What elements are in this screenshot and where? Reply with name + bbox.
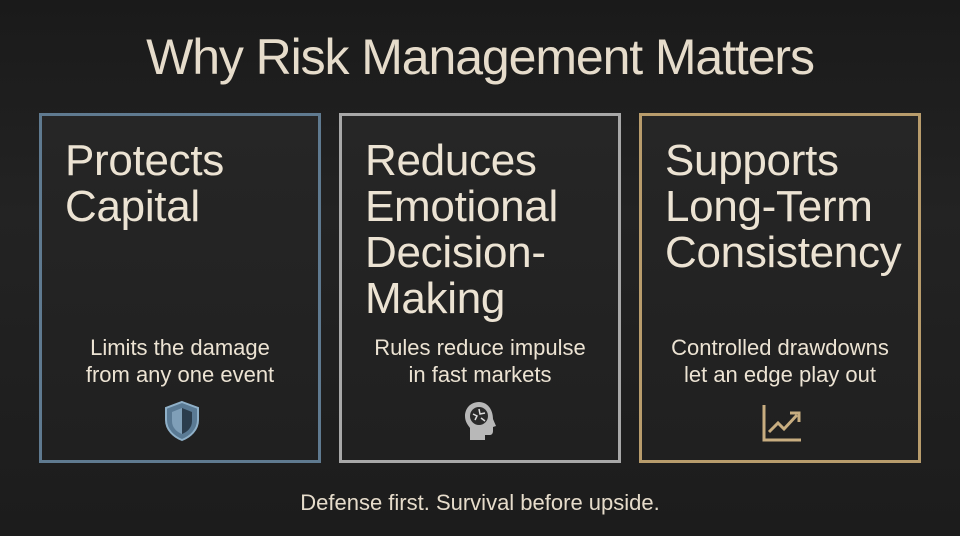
panel: protects capital (39, 113, 321, 463)
panel: reduces emotional decision-making (339, 113, 621, 463)
text: controlled drawdowns (671, 335, 889, 387)
heading: reduces emotional: Reduces (365, 136, 537, 185)
text: limits damage: from any one event (86, 362, 274, 387)
text: rules reduce impulse (374, 335, 586, 387)
text: limits damage: Limits the damage (90, 335, 270, 360)
text: limits damage (86, 335, 274, 387)
text: controlled drawdowns: let an edge play out (684, 362, 876, 387)
icon: head with brain (465, 402, 496, 440)
heading: protects capital: Protects (65, 136, 224, 185)
icon: shield (165, 400, 199, 441)
heading: supports long-term: Supports (665, 136, 839, 185)
text: controlled drawdowns: Controlled drawdowns (671, 335, 889, 360)
heading: protects capital (65, 136, 224, 231)
heading: reduces emotional: Decision- (365, 228, 546, 277)
heading: reduces emotional (365, 136, 558, 323)
heading: reduces emotional: Making (365, 274, 505, 323)
heading: supports long-term (665, 136, 902, 277)
heading: supports long-term: Consistency (665, 228, 901, 277)
icon: chart up (762, 405, 801, 442)
title: Why Risk Management Matters (146, 29, 814, 85)
text: rules reduce impulse: Rules reduce impulse (374, 335, 586, 360)
heading: protects capital: Capital (65, 182, 200, 231)
heading: supports long-term: Long-Term (665, 182, 873, 231)
heading: reduces emotional: Emotional (365, 182, 558, 231)
footer tagline: Defense first. Survival before upside. (300, 490, 660, 515)
panel: supports long-term consistency (639, 113, 921, 463)
text: rules reduce impulse: in fast markets (408, 362, 552, 387)
